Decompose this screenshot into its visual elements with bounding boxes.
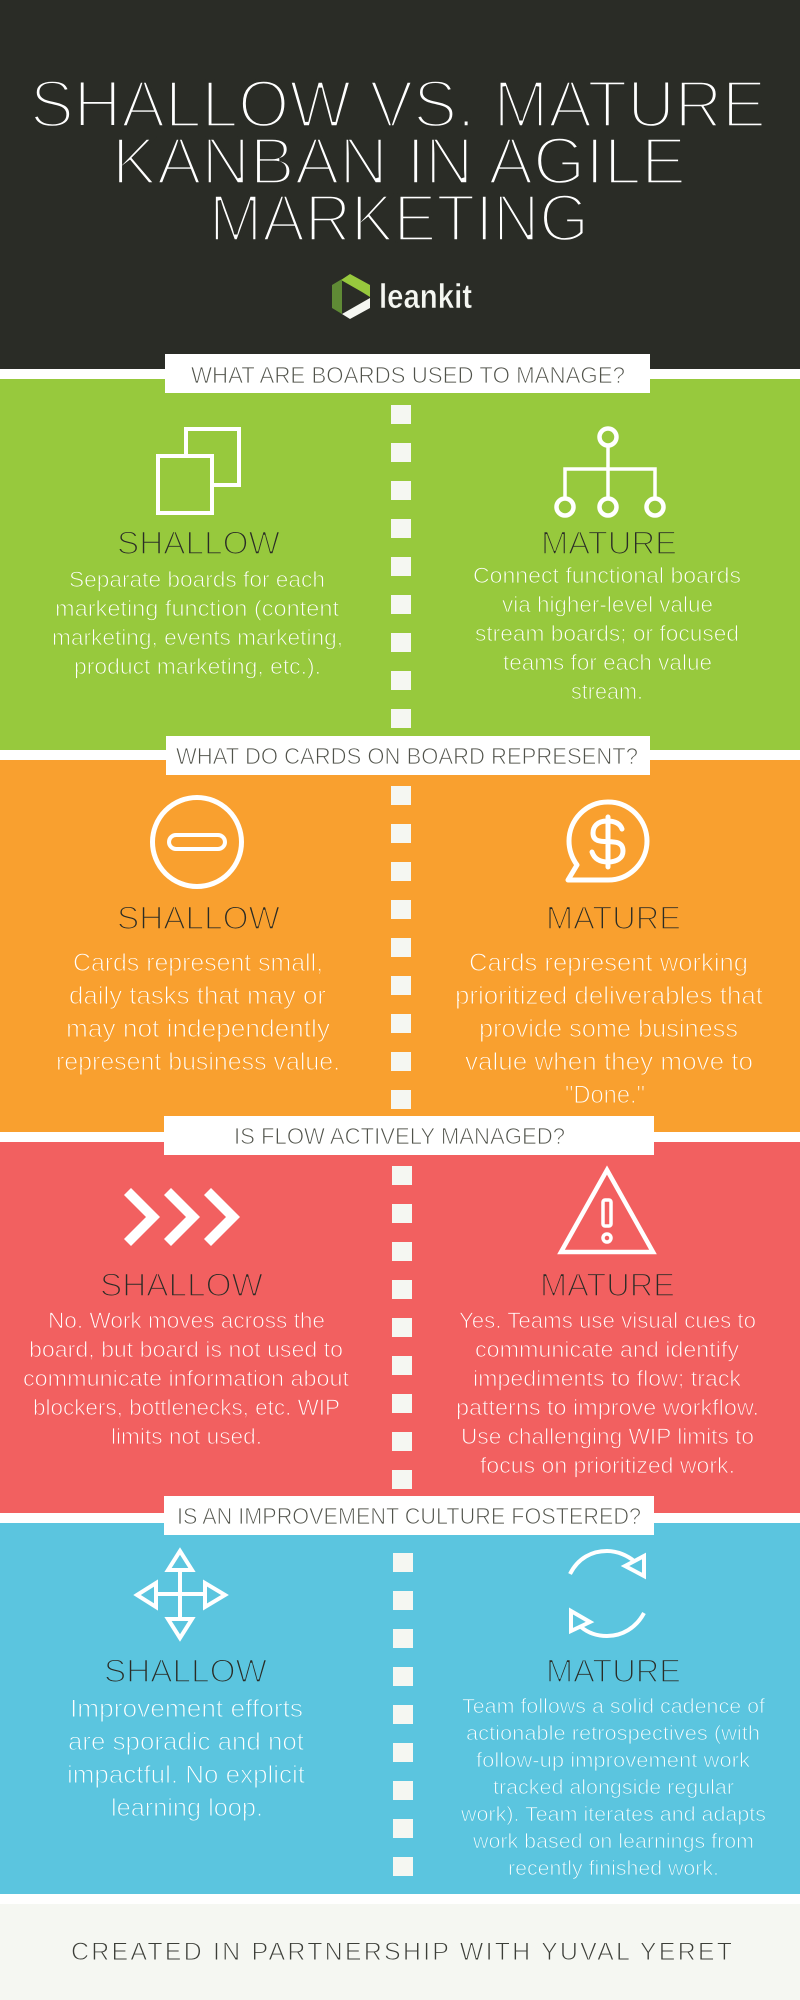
divider: dashed flow: [392, 1166, 412, 1489]
text: mature improvement: follow-up improvement work: [476, 1750, 751, 1772]
icon: overlapping boards: [158, 429, 239, 513]
footer credit: CREATED IN PARTNERSHIP WITH YUVAL YERET: [71, 1938, 732, 1966]
text: mature improvement: tracked alongside regular: [493, 1777, 734, 1799]
text: mature improvement: recently finished work.: [508, 1858, 719, 1880]
question label: cards: WHAT DO CARDS ON BOARD REPRESENT?: [176, 743, 638, 769]
text: mature flow: Yes. Teams use visual cues to: [459, 1308, 756, 1333]
title: [30, 67, 766, 256]
title: KANBAN IN AGILE: [112, 124, 686, 199]
text: mature cards: prioritized deliverables that: [455, 982, 763, 1010]
text: shallow cards: [56, 949, 340, 1076]
text: shallow improvement: impactful. No explicit: [67, 1761, 305, 1789]
heading: shallow: SHALLOW: [104, 1653, 268, 1689]
text: mature boards: [473, 563, 741, 704]
text: shallow flow: limits not used.: [111, 1424, 262, 1449]
text: mature flow: [456, 1308, 759, 1478]
text: mature cards: [455, 949, 763, 1109]
text: shallow flow: [23, 1308, 349, 1449]
text: mature improvement: work). Team iterates and adapts: [460, 1804, 766, 1826]
question label: boards: [165, 354, 650, 393]
text: shallow cards: daily tasks that may or: [69, 982, 326, 1010]
icon: minus circle: [152, 798, 242, 886]
text: shallow flow: blockers, bottlenecks, etc. WIP: [33, 1395, 340, 1420]
text: shallow boards: [52, 567, 343, 679]
heading: mature: MATURE: [546, 1653, 681, 1689]
text: mature improvement: actionable retrospectives (with: [466, 1723, 760, 1745]
text: mature flow: Use challenging WIP limits to: [461, 1424, 754, 1449]
text: shallow flow: No. Work moves across the: [48, 1308, 325, 1333]
question label: cards: [166, 736, 650, 775]
text: shallow improvement: [67, 1695, 305, 1822]
header panel: [0, 0, 800, 369]
text: shallow cards: Cards represent small,: [73, 949, 323, 977]
logo: leankit: [332, 274, 472, 319]
text: mature improvement: Team follows a solid cadence of: [462, 1696, 765, 1718]
title: MARKETING: [209, 181, 589, 256]
text: mature improvement: work based on learnings from: [472, 1831, 754, 1853]
panel: flow: [0, 1142, 800, 1513]
heading: shallow: SHALLOW: [117, 525, 281, 561]
panel: boards: [0, 379, 800, 750]
text: mature cards: Cards represent working: [469, 949, 748, 977]
text: mature flow: communicate and identify: [475, 1337, 739, 1362]
text: mature boards: Connect functional boards: [473, 563, 741, 588]
panel: improvement: [0, 1523, 800, 1894]
text: mature boards: stream.: [571, 679, 643, 704]
heading: mature: MATURE: [546, 900, 681, 936]
text: shallow improvement: Improvement efforts: [70, 1695, 303, 1723]
text: shallow improvement: learning loop.: [111, 1794, 263, 1822]
text: mature cards: value when they move to: [465, 1048, 753, 1076]
heading: shallow: SHALLOW: [100, 1267, 264, 1303]
text: mature improvement: [460, 1696, 766, 1880]
text: shallow boards: product marketing, etc.).: [74, 654, 321, 679]
icon: chevrons: [124, 1188, 240, 1246]
icon: dollar speech bubble: [568, 802, 647, 880]
text: shallow cards: represent business value.: [56, 1048, 340, 1076]
panel: cards: [0, 760, 800, 1132]
question label: improvement: [164, 1496, 654, 1535]
text: shallow cards: may not independently: [66, 1015, 331, 1043]
text: mature flow: patterns to improve workflow.: [456, 1395, 759, 1420]
question label: flow: [164, 1116, 654, 1155]
question label: improvement: IS AN IMPROVEMENT CULTURE FOSTERED?: [177, 1503, 641, 1529]
icon: hierarchy: [556, 428, 664, 516]
text: mature boards: teams for each value: [503, 650, 712, 675]
divider: dashed improvement: [393, 1553, 413, 1876]
heading: mature: MATURE: [540, 1267, 675, 1303]
icon: four-way arrows: [137, 1551, 225, 1638]
text: mature cards: "Done.": [565, 1081, 645, 1109]
text: mature boards: stream boards; or focused: [475, 621, 739, 646]
text: mature cards: provide some business: [479, 1015, 738, 1043]
text: mature boards: via higher-level value: [502, 592, 713, 617]
divider: dashed boards: [391, 405, 411, 728]
text: shallow improvement: are sporadic and not: [68, 1728, 304, 1756]
text: shallow flow: communicate information about: [23, 1366, 349, 1391]
heading: mature: MATURE: [541, 525, 677, 561]
question label: boards: WHAT ARE BOARDS USED TO MANAGE?: [191, 362, 625, 388]
text: shallow boards: Separate boards for each: [69, 567, 325, 592]
heading: shallow: SHALLOW: [117, 900, 281, 936]
text: mature flow: focus on prioritized work.: [480, 1453, 735, 1478]
title: SHALLOW VS. MATURE: [30, 67, 766, 142]
divider: dashed cards: [391, 786, 411, 1109]
question label: flow: IS FLOW ACTIVELY MANAGED?: [234, 1123, 565, 1149]
icon: warning triangle: [561, 1170, 653, 1252]
text: mature flow: impediments to flow; track: [473, 1366, 742, 1391]
footer panel: [0, 1904, 800, 2000]
text: shallow boards: marketing function (content: [55, 596, 339, 621]
text: shallow boards: marketing, events marketing,: [52, 625, 343, 650]
logo: leankit: leankit: [379, 278, 472, 316]
icon: cycle arrows: [570, 1551, 644, 1636]
text: shallow flow: board, but board is not used to: [29, 1337, 343, 1362]
